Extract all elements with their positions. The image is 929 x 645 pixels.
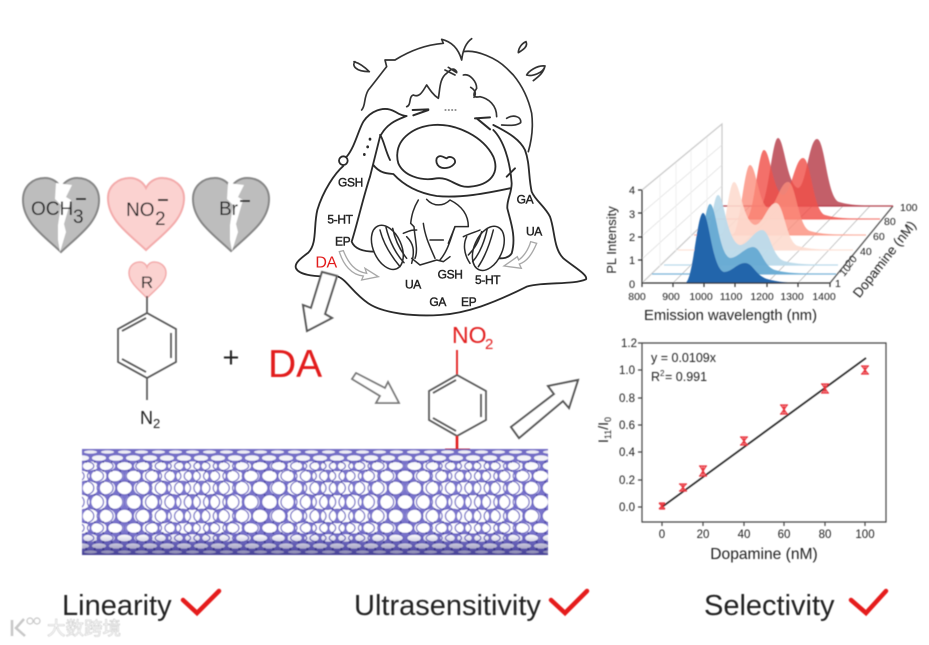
y tick labels: 1.2 — [621, 338, 637, 350]
text: interferent labels: EP — [461, 295, 477, 309]
plot frame and ticks — [638, 343, 886, 526]
equation — [651, 351, 717, 384]
equation: R — [651, 370, 660, 384]
cartoon: character under blanket — [296, 39, 586, 315]
benzene ring — [118, 296, 176, 400]
dopamine tick labels: 10 — [837, 262, 854, 279]
dots — [364, 139, 370, 155]
text: interferent labels: UA — [405, 278, 421, 292]
icon: R heart — [129, 262, 166, 298]
icon: check — [183, 591, 219, 613]
y tick labels: 3 — [629, 209, 635, 221]
icon: heart NO2: NO — [126, 200, 154, 221]
face — [373, 109, 515, 197]
series: 80 nM — [746, 150, 880, 219]
icon: broken heart OCH3: OCH — [31, 199, 73, 220]
y tick labels — [619, 338, 637, 514]
red linker — [445, 436, 470, 450]
dopamine tick labels: 1 — [835, 278, 841, 290]
series: 40 nM — [716, 182, 853, 250]
watermark — [12, 618, 121, 639]
x tick labels: 1400 — [812, 291, 836, 303]
y axis title: 0 — [603, 417, 613, 422]
y tick labels: 0 — [629, 279, 635, 291]
nanotube — [82, 449, 548, 555]
x tick labels: 1100 — [720, 291, 742, 303]
series: 1 nM — [685, 213, 800, 283]
x axis title: Dopamine (nM) — [710, 546, 818, 563]
icon: broken heart OCH3: 3 — [73, 207, 84, 228]
dopamine tick labels: 40 — [860, 246, 872, 258]
y tick labels: 0.6 — [619, 420, 635, 432]
arrow: to spectra — [511, 380, 578, 438]
series: 10 nM — [692, 204, 836, 274]
arrow: DA exits blanket — [303, 272, 337, 331]
y tick labels: 1.0 — [619, 365, 635, 377]
text: NO2 label: 2 — [485, 336, 493, 353]
x axis title: Emission wavelength (nm) — [644, 308, 817, 324]
y tick labels: 4 — [629, 185, 635, 197]
text: NO2 label — [452, 322, 493, 353]
y axis title: I — [595, 439, 611, 443]
arrow: inner left — [339, 251, 378, 280]
y axis title: PL Intensity — [604, 206, 619, 274]
series: 100 nM — [760, 138, 893, 206]
text: interferent labels: 5-HT — [475, 273, 501, 287]
icon: broken heart Br — [193, 178, 269, 251]
dopamine tick labels: 100 — [900, 202, 918, 214]
icon: broken heart Br: Br — [219, 199, 239, 220]
series baselines — [652, 206, 893, 274]
x tick labels: 1000 — [689, 291, 713, 303]
series: 20 nM — [700, 195, 838, 265]
x tick labels: 100 — [855, 529, 875, 541]
footer: ultrasensitivity: Ultrasensitivity — [354, 590, 541, 622]
icon: heart NO2 — [108, 178, 184, 250]
text: NO2 label: NO — [452, 322, 486, 348]
x tick labels: 900 — [662, 291, 680, 303]
chart: 3D PL spectra — [604, 124, 919, 324]
dopamine tick labels: 60 — [873, 231, 885, 243]
x tick labels: 1300 — [780, 291, 804, 303]
panel: diazonium molecule — [118, 262, 176, 431]
x tick labels: 40 — [738, 529, 750, 541]
right side floor edge — [830, 206, 893, 283]
text: interferent labels: GA — [517, 192, 534, 206]
equation: = 0.991 — [665, 370, 707, 384]
text: N2 label: 2 — [153, 416, 160, 431]
text: DA in blanket: DA — [315, 254, 338, 271]
x tick labels: 1200 — [750, 291, 774, 303]
series: 60 nM — [732, 165, 866, 235]
icon: check — [551, 591, 587, 613]
icon: broken heart OCH3 — [23, 178, 99, 252]
x tick labels: 0 — [659, 529, 665, 541]
y tick labels — [629, 185, 635, 291]
y axis title: 11 — [603, 430, 613, 439]
x tick labels: 800 — [628, 291, 646, 303]
blanket outline — [296, 109, 586, 315]
z axis title: Dopamine (nM) — [850, 218, 919, 301]
text: interferent labels: EP — [335, 234, 351, 248]
equation: 2 — [660, 369, 665, 378]
text: interferent labels — [327, 176, 542, 309]
text: interferent labels: 5-HT — [327, 213, 354, 227]
footer: linearity: Linearity — [62, 590, 172, 622]
text: interferent labels: GSH — [338, 176, 363, 190]
x tick labels — [628, 291, 836, 303]
x tick labels — [659, 529, 875, 541]
y tick labels: 0.4 — [619, 447, 636, 459]
panel: substituent hearts — [23, 178, 269, 252]
text: N2 label: N — [140, 408, 153, 428]
hair — [354, 39, 545, 152]
y tick labels: 0.2 — [619, 475, 635, 487]
text: N2 label — [140, 408, 160, 431]
DA label: DA — [268, 343, 322, 386]
text: interferent labels: GA — [429, 295, 446, 309]
icon: check — [851, 591, 886, 613]
text: R label: R — [141, 273, 153, 292]
panel: nitrophenyl molecule — [429, 322, 493, 450]
chart: linear calibration — [595, 338, 886, 563]
y tick labels: 0.0 — [619, 502, 635, 514]
dopamine tick labels — [835, 202, 918, 290]
x tick labels: 80 — [819, 529, 831, 541]
footer: selectivity: Selectivity — [704, 590, 835, 622]
plus sign: + — [223, 342, 239, 374]
x tick labels: 60 — [778, 529, 790, 541]
y tick labels: 0.8 — [619, 393, 635, 405]
text: interferent labels: GSH — [438, 268, 463, 282]
dopamine tick labels: 80 — [884, 216, 896, 228]
footer: linearity — [62, 590, 219, 622]
body and shoes — [365, 199, 511, 275]
y tick labels: 1 — [629, 255, 635, 267]
text: interferent labels: UA — [526, 224, 542, 238]
red bond — [456, 350, 458, 375]
benzene ring — [429, 375, 486, 436]
data points with error bars — [659, 366, 869, 509]
fit line — [662, 358, 866, 507]
y tick labels: 2 — [629, 232, 635, 244]
back walls — [642, 124, 893, 283]
equation: y = 0.0109x — [651, 351, 717, 365]
watermark: 大数跨境 — [47, 618, 121, 639]
axes — [638, 190, 830, 287]
arrow: inner right — [504, 242, 537, 268]
dopamine tick labels: 20 — [843, 253, 860, 270]
arrow: DA to nitrophenyl — [352, 373, 399, 403]
y axis title: /I — [595, 422, 611, 430]
icon: heart NO2: 2 — [155, 209, 166, 230]
x tick labels: 20 — [697, 529, 709, 541]
